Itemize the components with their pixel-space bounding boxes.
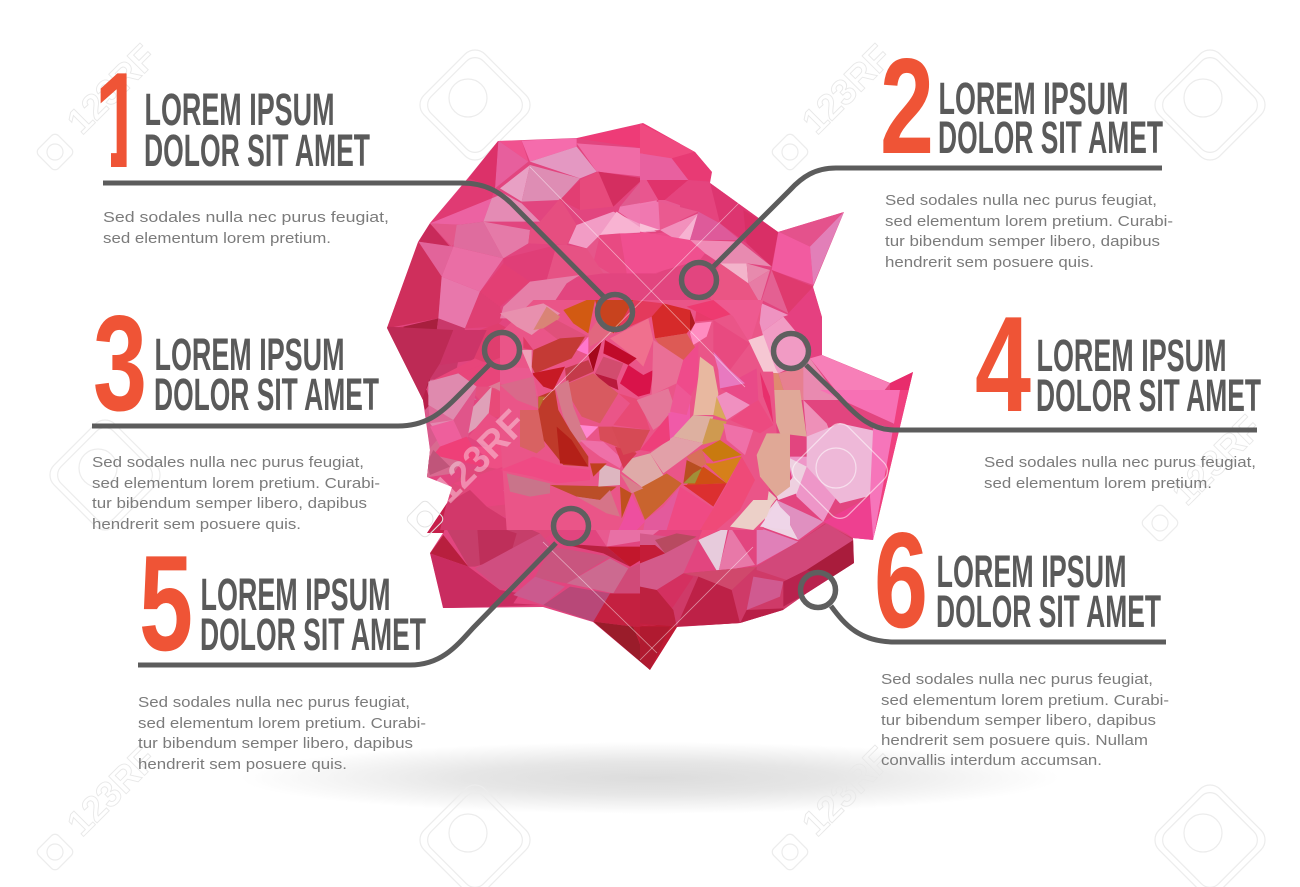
body text 5	[138, 694, 426, 773]
body text 6: sed elementum lorem pretium. Curabi-	[881, 692, 1169, 709]
heading 1	[144, 84, 370, 176]
body text 6	[881, 671, 1169, 769]
watermark over rose: 123RF	[426, 402, 535, 511]
callout 1	[94, 44, 632, 330]
callout 3	[92, 287, 520, 533]
body text 6: tur bibendum semper libero, dapibus	[881, 712, 1156, 729]
rose: left petal facets	[387, 326, 506, 530]
heading 3: LOREM IPSUM	[154, 329, 344, 380]
number 4: 4	[975, 288, 1031, 440]
callout 6	[800, 504, 1169, 769]
body text 1	[103, 209, 389, 247]
heading 5: DOLOR SIT AMET	[200, 609, 426, 660]
body text 5: sed elementum lorem pretium. Curabi-	[138, 715, 426, 732]
ground shadow	[240, 742, 1060, 814]
leader line 1	[103, 183, 632, 330]
number 6: 6	[874, 504, 928, 656]
leader line 2	[682, 168, 1162, 298]
body text 3: sed elementum lorem pretium. Curabi-	[92, 475, 380, 492]
heading 2: LOREM IPSUM	[938, 73, 1128, 124]
leader line 5	[138, 508, 588, 665]
heading 4	[1036, 330, 1261, 421]
body text 5: hendrerit sem posuere quis.	[138, 756, 347, 773]
body text 4	[984, 454, 1256, 492]
body text 6: Sed sodales nulla nec purus feugiat,	[881, 671, 1153, 688]
watermark stamps: 123RF	[59, 738, 164, 844]
leader line 4	[774, 334, 1257, 430]
body text 2: Sed sodales nulla nec purus feugiat,	[885, 192, 1157, 209]
body text 3: hendrerit sem posuere quis.	[92, 516, 301, 533]
body text 3	[92, 454, 380, 533]
rose: upper-left facets	[387, 123, 680, 400]
body text 4: Sed sodales nulla nec purus feugiat,	[984, 454, 1256, 471]
rose: lower-right facets	[640, 390, 910, 670]
number 2: 2	[880, 30, 934, 182]
leader line 6	[800, 572, 1166, 642]
heading 1: DOLOR SIT AMET	[144, 125, 370, 176]
body text 2: tur bibendum semper libero, dapibus	[885, 233, 1160, 250]
callout 4	[774, 288, 1261, 492]
leader line 3	[92, 332, 520, 426]
heading 1: LOREM IPSUM	[144, 84, 334, 135]
body text 3: Sed sodales nulla nec purus feugiat,	[92, 454, 364, 471]
body text 1: Sed sodales nulla nec purus feugiat,	[103, 209, 389, 226]
watermark stamps: 123RF	[1164, 407, 1269, 513]
rose: pale watermark lines	[530, 167, 753, 660]
number 3: 3	[93, 287, 147, 439]
heading 5: LOREM IPSUM	[200, 569, 390, 620]
body text 6: hendrerit sem posuere quis. Nullam	[881, 732, 1148, 749]
heading 6: LOREM IPSUM	[936, 546, 1126, 597]
watermark over rose	[405, 402, 892, 539]
body text 2	[885, 192, 1173, 271]
number 5: 5	[139, 527, 193, 679]
body text 2: hendrerit sem posuere quis.	[885, 254, 1094, 271]
number 1: 1	[94, 44, 148, 196]
body text 4: sed elementum lorem pretium.	[984, 475, 1212, 492]
body text 5: Sed sodales nulla nec purus feugiat,	[138, 694, 410, 711]
watermark stamps: 123RF	[794, 738, 899, 844]
low-poly rose illustration	[380, 110, 920, 680]
rose: upper-right facets	[640, 123, 913, 400]
body text 3: tur bibendum semper libero, dapibus	[92, 495, 367, 512]
heading 6	[936, 546, 1161, 637]
body text 6: convallis interdum accumsan.	[881, 752, 1102, 769]
body text 5: tur bibendum semper libero, dapibus	[138, 735, 413, 752]
watermark stamps: 123RF	[794, 36, 899, 142]
rose: lower-left facets	[420, 390, 680, 670]
rose: central spiral facets	[500, 300, 790, 530]
body text 2: sed elementum lorem pretium. Curabi-	[885, 213, 1173, 230]
watermark stamps: 123RF	[59, 36, 164, 142]
heading 3: DOLOR SIT AMET	[154, 369, 379, 420]
body text 1: sed elementum lorem pretium.	[103, 230, 331, 247]
heading 2	[938, 73, 1163, 163]
callout 2	[682, 30, 1173, 298]
heading 3	[154, 329, 379, 420]
heading 5	[200, 569, 426, 660]
callout 5	[138, 508, 588, 773]
